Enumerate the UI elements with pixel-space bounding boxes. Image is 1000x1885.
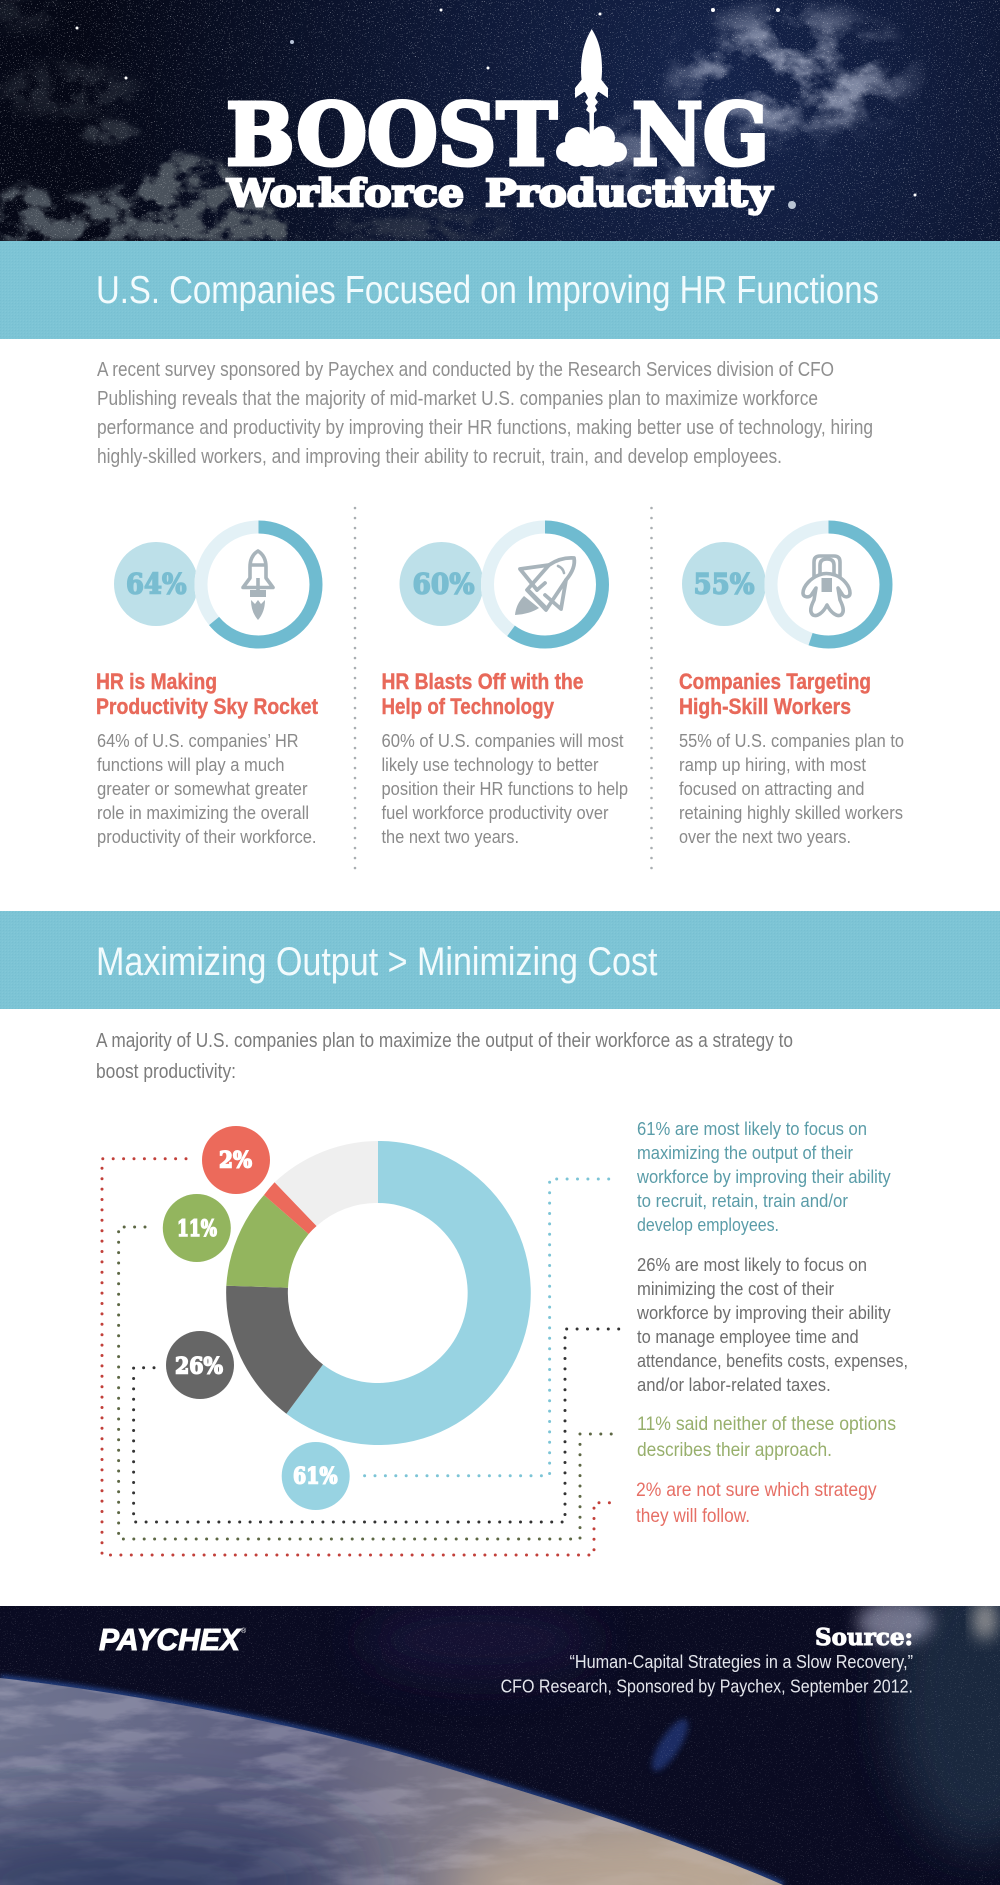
source credit: CFO Research, Sponsored by Paychex, September 2012. [501,1676,913,1696]
dotted column dividers [355,508,652,870]
intro paragraph: Publishing reveals that the majority of mid-market U.S. companies plan to maximize workforce [97,388,818,410]
legend text: 61% [636,1118,891,1235]
stat: 64% badge: 64% [126,568,186,600]
body text [382,731,628,847]
body text: greater or somewhat greater [97,779,308,799]
badge: 26% [166,1331,234,1399]
legend text: 2%: they will follow. [636,1505,750,1527]
legend text: 2% [636,1479,877,1527]
stat: 64% badge [114,542,198,626]
stat: 60% badge: 60% [412,568,474,600]
legend text: 26%: workforce by improving their ability [636,1302,891,1323]
legend text: 26%: attendance, benefits costs, expenses, [637,1350,908,1371]
badge: 26%: 26% [175,1354,223,1380]
legend text: 2%: 2% are not sure which strategy [636,1479,877,1501]
legend text: 26%: 26% are most likely to focus on [637,1254,867,1275]
badge: 61%: 61% [293,1464,338,1490]
panel: 55 percent column [679,520,904,847]
body text: the next two years. [382,827,519,847]
segment: remainder [275,1141,378,1226]
title word: BOOST: BOOST [226,86,557,186]
heading: HR Blasts Off with the [382,669,584,694]
heading [96,669,319,719]
section band 1 [0,241,1000,339]
badge: 2%: 2% [219,1148,252,1174]
section band 2 [0,911,1000,1009]
header: starry sky [0,0,1000,241]
logo: PAYCHEX: ® [241,1627,247,1635]
heading: Productivity Sky Rocket [96,694,319,719]
legend text: 26%: minimizing the cost of their [637,1278,834,1299]
legend text: 26%: and/or labor-related taxes. [637,1374,831,1395]
legend text: 26%: to manage employee time and [637,1326,859,1347]
subtitle word: Productivity: Productivity [485,171,774,215]
body text: 64% of U.S. companies’ HR [97,731,298,751]
intro paragraph [97,359,873,468]
panel: 60 percent column [382,520,628,847]
panel: 64 percent column [96,520,322,847]
heading: Help of Technology [382,694,555,719]
badge: 61% [282,1442,350,1510]
intro paragraph: highly-skilled workers, and improving their ability to recruit, train, and develop employees. [97,446,782,468]
body text: productivity of their workforce. [97,827,316,847]
heading [382,669,584,719]
legend text: 61%: 61% are most likely to focus on [637,1118,867,1139]
body text: role in maximizing the overall [97,803,309,823]
stat: 60% badge [400,542,484,626]
section 2 intro text: boost productivity: [96,1060,236,1083]
body text: likely use technology to better [382,755,599,775]
section 2 intro text: A majority of U.S. companies plan to maximize the output of their workforce as a strategy to [96,1029,793,1052]
legend text: 11% [637,1413,896,1461]
body text: focused on attracting and [679,779,864,799]
ring chart: 60% [481,520,609,648]
title [226,29,774,215]
body text: functions will play a much [97,755,284,775]
legend text: 11%: 11% said neither of these options [637,1413,896,1435]
icon: rocket [243,551,273,620]
badge: 2% [202,1126,270,1194]
segment: 2% [264,1182,317,1234]
body text: 55% of U.S. companies plan to [679,731,904,751]
legend text: 61%: develop employees. [637,1214,779,1235]
segment: 61% [286,1141,531,1445]
source credit: “Human-Capital Strategies in a Slow Recovery,” [570,1651,913,1672]
intro paragraph: A recent survey sponsored by Paychex and conducted by the Research Services division of CFO [97,359,834,381]
segment: 11% [226,1195,309,1288]
heading: HR is Making [96,669,217,694]
dotted leader lines [102,1159,619,1555]
body text: ramp up hiring, with most [679,755,866,775]
body text: over the next two years. [679,827,851,847]
legend text: 61%: to recruit, retain, train and/or [637,1190,848,1211]
source credit: Source: [815,1624,913,1651]
body text: position their HR functions to help [382,779,628,799]
footer: earth from space [0,1606,1000,1885]
section 2 intro text [96,1029,793,1083]
icon: rocket as the letter I [556,29,627,167]
title word: NG: NG [632,86,769,186]
legend text: 61%: maximizing the output of their [637,1142,853,1163]
heading [679,669,871,719]
leader: 11% [119,1227,619,1539]
badge: 11% [163,1194,231,1262]
section heading 1: U.S. Companies Focused on Improving HR Functions [96,269,879,312]
source credit [501,1624,913,1696]
stat: 55% badge: 55% [694,568,754,600]
body text: 60% of U.S. companies will most [382,731,624,751]
intro paragraph: performance and productivity by improving their HR functions, making better use of technology, hiring [97,417,873,439]
leader: 2% [102,1159,619,1555]
legend text: 61%: workforce by improving their ability [636,1166,891,1187]
heading: Companies Targeting [679,669,871,694]
logo: PAYCHEX: PAYCHEX [99,1622,242,1657]
body text: retaining highly skilled workers [679,803,903,823]
icon: astronaut [803,556,850,616]
body text [679,731,904,847]
body text: fuel workforce productivity over [382,803,608,823]
ring chart: 55% [764,520,892,648]
heading: High-Skill Workers [679,694,851,719]
subtitle word: Workforce: Workforce [226,171,464,215]
icon: space shuttle [515,558,574,615]
segment: 26% [226,1286,323,1414]
donut chart [226,1141,531,1445]
badge: 11%: 11% [177,1216,217,1242]
leader: 26% [134,1329,619,1522]
legend text: 11%: describes their approach. [637,1439,832,1461]
stat: 55% badge [682,542,766,626]
body text [97,731,316,847]
section heading 2: Maximizing Output > Minimizing Cost [96,940,658,984]
ring chart: 64% [194,520,322,648]
leader: 61% [365,1179,619,1476]
legend text: 26% [636,1254,908,1395]
